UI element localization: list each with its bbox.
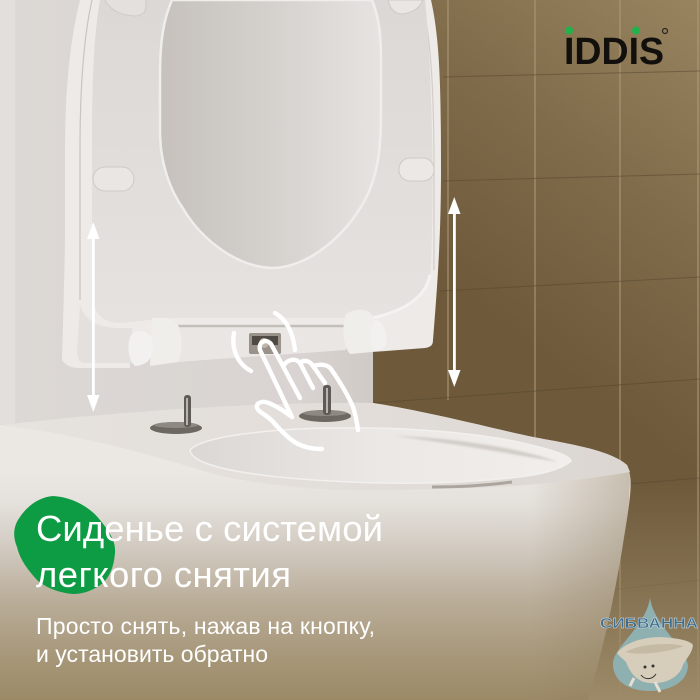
hinge bar <box>128 310 386 366</box>
heading: легкого снятия <box>36 554 291 595</box>
toilet bowl <box>0 403 631 700</box>
body text <box>36 613 375 667</box>
lid rim groove <box>80 0 92 300</box>
icon: press arrow right <box>448 197 460 387</box>
toilet seat lid <box>62 0 441 368</box>
watermark: Sibvanna: СИБВАННА <box>600 615 698 632</box>
heading <box>36 508 383 595</box>
watermark: Sibvanna <box>600 598 698 692</box>
lid recess <box>92 0 433 323</box>
hinge post left <box>150 395 202 434</box>
lower-left lid panel <box>77 305 132 363</box>
release button <box>249 333 281 354</box>
lid oval recess <box>160 0 381 268</box>
heading: Сиденье с системой <box>36 508 383 549</box>
body text: и установить обратно <box>36 641 268 667</box>
body text: Просто снять, нажав на кнопку, <box>36 613 375 639</box>
icon: pressing hand <box>233 313 358 449</box>
seat bumpers <box>93 167 134 191</box>
bowl opening <box>190 428 571 483</box>
rim deck <box>0 403 630 490</box>
logo: IDDIS: IDDIS <box>564 31 664 73</box>
cistern and white wall <box>0 0 373 426</box>
green blob <box>14 496 115 594</box>
hinge post right <box>299 385 351 422</box>
icon: press arrow left <box>87 222 100 412</box>
